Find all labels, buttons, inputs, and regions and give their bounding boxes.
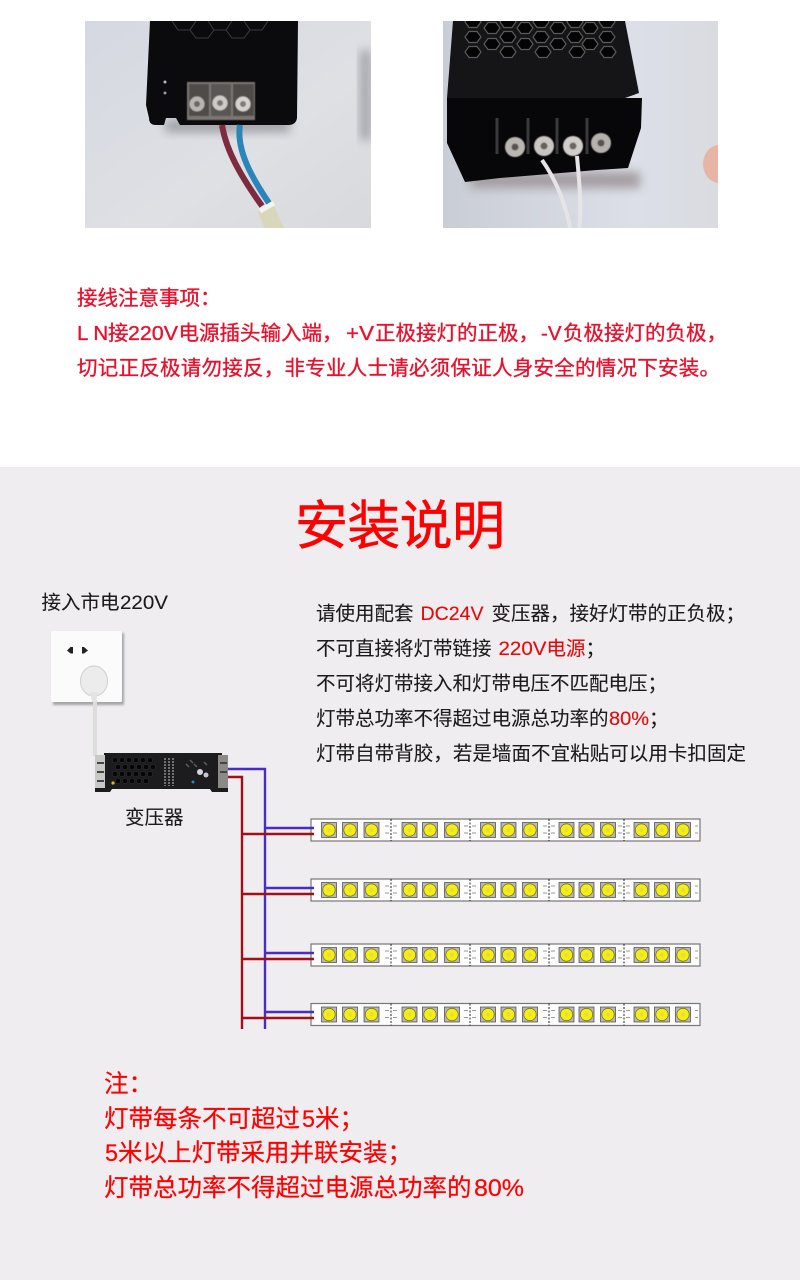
LED strip 2 [311,879,700,901]
instruction list [316,603,746,765]
instruction 5: 灯带自带背胶，若是墙面不宜粘贴可以用卡扣固定 [316,743,746,765]
LED strip 1 [311,819,700,841]
instruction 1: 请使用配套 [316,603,414,625]
notes heading: 接线注意事项： [77,287,220,310]
icon: transformer power supply [95,753,228,792]
note line 1: 5 [302,1106,315,1133]
note line 3: 灯带总功率不得超过电源总功率的 [104,1174,472,1202]
icon: wall socket with plug [51,631,124,756]
note line 2: 米以上灯带采用并联安装； [118,1139,412,1167]
instruction 2: ； [586,638,605,660]
instruction 4: ； [649,708,669,730]
notes line 1: -V [541,322,562,345]
notes line 1: 负极接灯的负极， [563,322,727,345]
instruction 2: 不可直接将灯带链接 [316,638,492,660]
instruction 4: 80% [609,708,649,730]
notes line 1: L N [77,322,108,345]
instruction 1: 变压器，接好灯带的正负极； [492,603,745,625]
notes line 1: 接 [108,322,128,345]
instruction 2: 220V [498,638,546,660]
panel: installation instructions background [0,467,800,1280]
title: 安装说明 [295,497,505,556]
note block [104,1070,524,1202]
notes line 1: +V [346,322,374,345]
notes line 1: 220V [128,322,178,345]
label: mains input: 220V [120,592,168,614]
instruction 3: 不可将灯带接入和灯带电压不匹配电压； [316,673,667,695]
note line 1: 灯带每条不可超过 [104,1105,300,1133]
instruction 4: 灯带总功率不得超过电源总功率的 [316,708,609,730]
note line 2: 5 [105,1140,118,1167]
notes line 1: 正极接灯的正极， [375,322,539,345]
note line 1: 米； [315,1105,364,1133]
label: transformer: 变压器 [125,807,184,829]
wiring notes [77,287,727,380]
wiring diagram: parallel lines [228,769,314,1029]
LED strip 3 [311,944,700,966]
instruction 2: 电源 [546,638,586,660]
photo: DC output terminals with white wires [443,16,735,232]
note heading: 注： [104,1070,153,1098]
notes line 1: 电源插头输入端， [178,322,342,345]
label: mains input: 接入市电 [42,592,120,614]
note line 3: 80% [474,1175,524,1202]
photo: AC input terminals with red and blue wires [85,21,371,232]
LED strip 4 [311,1004,700,1026]
notes line 2: 切记正反极请勿接反，非专业人士请必须保证人身安全的情况下安装。 [77,357,720,380]
instruction 1: DC24V [420,603,484,625]
